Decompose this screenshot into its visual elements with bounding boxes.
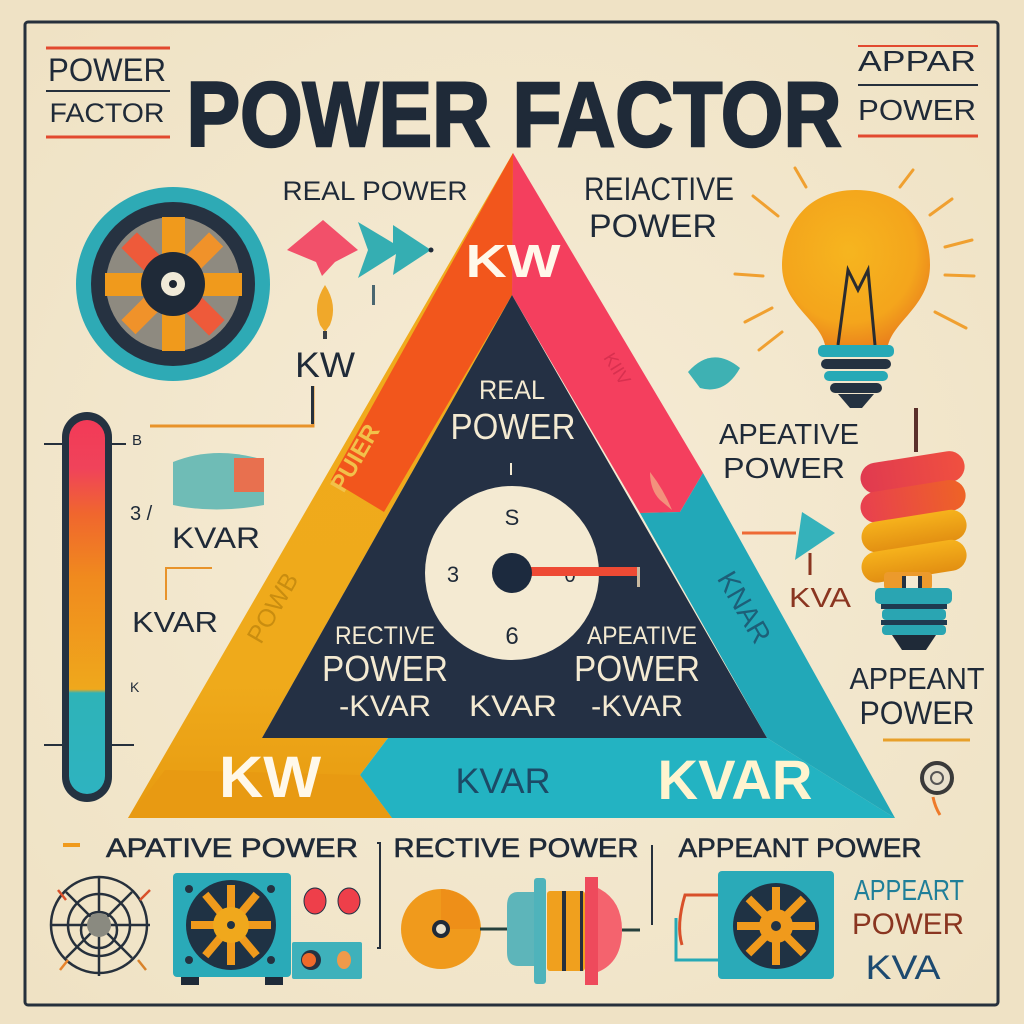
label: appeant power	[850, 661, 985, 740]
label: kw left: KW	[295, 346, 355, 385]
triangle labels: -KVAR	[339, 690, 431, 723]
bottom headings: RECTIVE POWER	[394, 833, 638, 863]
label: kva: KVA	[789, 582, 851, 613]
label: kvar 2: KVAR	[132, 607, 218, 639]
title: POWER FACTOR	[186, 64, 842, 166]
gauge dial: 6	[505, 623, 519, 650]
icon: coil bulb	[858, 408, 969, 650]
triangle labels: POWER	[450, 406, 576, 447]
label: power factor top left	[46, 48, 170, 137]
thermometer bar: K	[130, 679, 140, 695]
label: reactive power	[584, 171, 734, 244]
label: power factor top left: POWER	[48, 52, 166, 88]
triangle labels: KIIV	[600, 349, 635, 389]
label: power factor top left: FACTOR	[50, 98, 164, 128]
thermometer bar: 3 /	[130, 503, 153, 525]
label: appeart power kva: POWER	[852, 908, 964, 941]
label: reactive power: POWER	[589, 208, 717, 244]
label: appeant power: POWER	[860, 695, 974, 731]
icon: fan unit right	[676, 871, 834, 979]
icon: light bulb	[735, 168, 974, 408]
gauge dial: 3	[447, 562, 459, 587]
label: appeart power kva: KVA	[866, 949, 941, 987]
gauge dial	[425, 463, 640, 660]
gauge dial: 0	[564, 565, 576, 587]
label: kvar 1: KVAR	[172, 522, 260, 555]
label: apeative power	[719, 419, 859, 485]
label: appeart power kva: APPEART	[854, 875, 964, 907]
triangle labels: POWB	[242, 568, 304, 648]
gauge dial: S	[505, 505, 519, 530]
triangle labels: POWER	[574, 648, 700, 689]
triangle labels: KVAR	[469, 690, 557, 723]
icon: fan gauge	[76, 187, 270, 381]
icon: teal blob	[688, 357, 740, 389]
icon: fan guard	[50, 876, 150, 976]
triangle labels: REAL	[479, 375, 545, 405]
bottom headings: APATIVE POWER	[106, 833, 358, 863]
icon: indicator panel	[292, 888, 362, 979]
triangle labels: PUIER	[325, 420, 386, 497]
label: apparent power top right	[858, 46, 978, 136]
triangle labels: KVAR	[658, 748, 812, 811]
label: apparent power top right: APPAR	[858, 46, 976, 78]
label: appeart power kva	[852, 875, 964, 987]
label: kvar 2	[132, 568, 218, 639]
thermometer bar	[44, 412, 153, 802]
arrow to kva	[742, 512, 835, 575]
triangle labels: KW	[219, 745, 321, 810]
power triangle	[128, 153, 895, 818]
triangle labels: RECTIVE	[335, 622, 435, 650]
triangle labels: KW	[466, 235, 561, 287]
label: appeant power: APPEANT	[850, 661, 985, 696]
thermometer bar: B	[132, 432, 142, 449]
triangle labels: KVAR	[456, 762, 550, 801]
icon: capacitor block	[173, 453, 264, 510]
label: apparent power top right: POWER	[858, 95, 976, 127]
label: real power: REAL POWER	[282, 176, 468, 206]
label: reactive power: REIACTIVE	[584, 171, 734, 207]
label: apeative power: APEATIVE	[719, 419, 859, 451]
triangle labels: -KVAR	[591, 690, 683, 723]
icon: small spiral	[922, 763, 952, 815]
bottom headings	[63, 833, 922, 948]
triangle labels	[219, 235, 812, 811]
triangle labels: APEATIVE	[587, 622, 697, 650]
triangle labels: KNAR	[711, 566, 777, 649]
icon: fan unit left	[173, 873, 291, 985]
label: kw left	[150, 346, 355, 426]
label: apeative power: POWER	[723, 453, 845, 485]
icon: arrows	[287, 220, 434, 339]
bottom headings: APPEANT POWER	[678, 833, 922, 863]
icon: capacitor cylinder	[401, 877, 640, 985]
triangle labels: POWER	[322, 648, 448, 689]
